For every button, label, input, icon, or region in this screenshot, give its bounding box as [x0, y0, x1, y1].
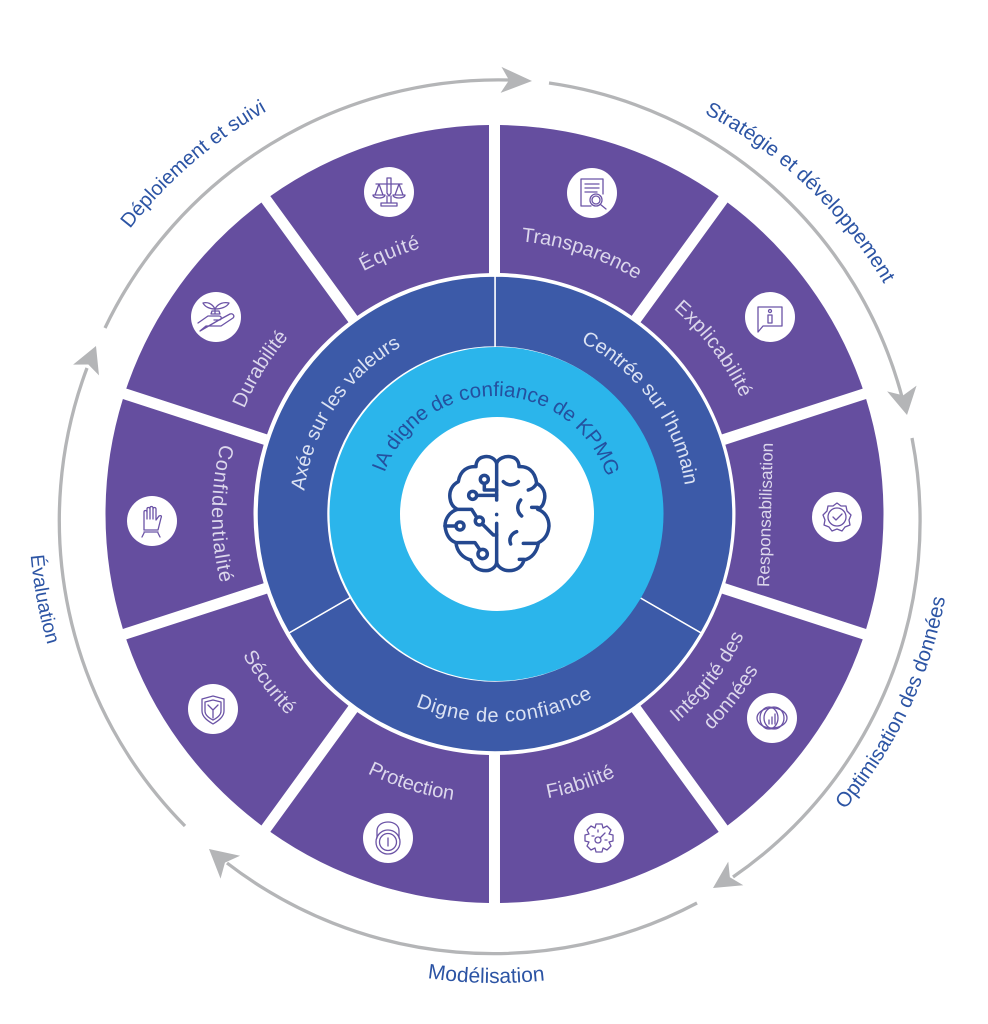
- label: Confidentialité: Confidentialité: [212, 446, 234, 582]
- icon: raised hand: [127, 496, 177, 546]
- arrow: optimisation vers modélisation: [705, 438, 920, 900]
- label: Optimisation des données: Optimisation des données: [836, 597, 945, 806]
- panel: Responsabilisation segment: [685, 399, 934, 666]
- label: Responsabilisation: Responsabilisation: [753, 442, 777, 587]
- panel: Équité segment: [270, 125, 489, 316]
- core: white centre: [400, 417, 594, 611]
- panel: Protection segment: [270, 712, 489, 903]
- icon: padlock: [363, 813, 413, 863]
- panel: Explicabilité segment: [640, 202, 863, 434]
- icon: scales of justice: [364, 167, 414, 217]
- icon: brain circuit: [445, 457, 549, 571]
- panel: Transparence segment: [500, 125, 719, 316]
- arrow: modélisation vers évaluation: [199, 838, 697, 954]
- label: Modélisation: Modélisation: [429, 964, 544, 984]
- core: light blue ring: [330, 347, 664, 681]
- label: Stratégie et développement: Stratégie et développement: [706, 103, 894, 284]
- ring: Axée sur les valeurs: [258, 276, 496, 634]
- icon: gear gauge: [574, 813, 624, 863]
- ring: Centrée sur l'humain: [496, 276, 732, 632]
- label: Durabilité: Durabilité: [232, 330, 286, 408]
- label: Protection: Protection: [368, 762, 453, 800]
- arrow: évaluation vers déploiement: [59, 341, 185, 826]
- label: Transparence: Transparence: [523, 228, 640, 278]
- label: Sécurité: Sécurité: [244, 650, 297, 714]
- label: Fiabilité: Fiabilité: [546, 764, 614, 798]
- icon: shield: [188, 684, 238, 734]
- panel: Intégrité des données segment: [640, 594, 863, 826]
- arrow: déploiement vers stratégie: [105, 67, 532, 328]
- label: Centrée sur l'humain: Centrée sur l'humain: [584, 332, 697, 484]
- ring: Digne de confiance: [290, 598, 701, 752]
- label: Digne de confiance: Digne de confiance: [417, 690, 591, 722]
- label: Axée sur les valeurs: Axée sur les valeurs: [292, 338, 400, 491]
- label: Intégrité des données: Intégrité des données: [670, 632, 757, 728]
- icon: information speech bubble: [745, 292, 795, 342]
- icon: document with magnifier: [567, 168, 617, 218]
- icon: hand holding a plant: [191, 292, 241, 342]
- panel: Durabilité segment: [126, 202, 348, 434]
- label: Explicabilité: Explicabilité: [674, 300, 753, 396]
- label: Évaluation: Évaluation: [30, 556, 57, 644]
- panel: Fiabilité segment: [500, 712, 719, 903]
- icon: eye with bar chart: [747, 693, 797, 743]
- label: Équité: Équité: [358, 234, 419, 270]
- arrow: stratégie vers optimisation: [549, 83, 922, 418]
- heading: IA digne de confiance de KPMG: IA digne de confiance de KPMG: [372, 381, 618, 475]
- panel: Sécurité segment: [126, 594, 348, 826]
- icon: certified badge: [812, 492, 862, 542]
- panel: Confidentialité segment: [106, 399, 264, 629]
- label: Déploiement et suivi: Déploiement et suivi: [120, 98, 266, 228]
